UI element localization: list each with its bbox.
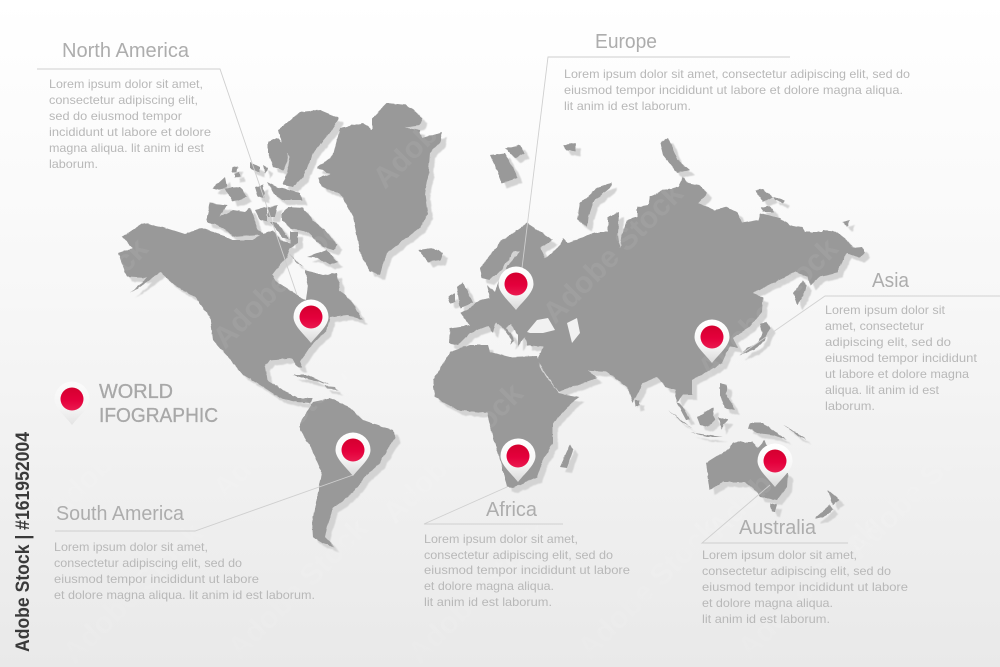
side credit: Adobe Stock | #161952004 [13, 432, 34, 652]
heading: Asia: Asia [872, 270, 910, 292]
island: Iceland [418, 248, 443, 262]
watermark: Adobe Stock [692, 232, 845, 385]
inland seas [527, 318, 580, 343]
continent: South America [300, 398, 395, 547]
pin: Africa [500, 438, 536, 482]
text block: Africa: et dolore magna aliqua. [424, 579, 554, 593]
continent: Eurasia [449, 177, 865, 403]
watermark: Adobe Stock [572, 512, 725, 665]
text block: Africa: eiusmod tempor incididunt ut labore [424, 563, 630, 577]
leader line: Australia [702, 485, 848, 543]
text block: Asia: amet, consectetur [825, 319, 924, 333]
leader line: Africa [424, 487, 563, 524]
watermark: Adobe Stock [842, 412, 995, 565]
watermark: Adobe Stock [732, 512, 885, 665]
heading: Europe: Europe [595, 31, 657, 53]
watermark: Adobe Stock [402, 517, 555, 667]
text block: Australia: consectetur adipiscing elit, sed do [702, 564, 891, 578]
text block: Europe [564, 67, 910, 113]
heading: Africa: Africa [486, 499, 538, 521]
watermark: Adobe Stock [207, 202, 360, 355]
heading: North America: North America [62, 40, 190, 62]
text block: North America [49, 77, 211, 171]
islands: Tasmania and New Zealand [770, 490, 840, 518]
watermark: Adobe Stock [207, 352, 360, 505]
legend pin [54, 382, 90, 425]
text block: South America [54, 540, 315, 602]
watermark: Adobe Stock [537, 72, 690, 225]
title: World Infographic: IFOGRAPHIC [99, 405, 218, 427]
watermark: Adobe Stock [832, 82, 985, 235]
text block: Asia: adipiscing elit, sed do [825, 335, 951, 349]
text block: Africa: lit anim id est laborum. [424, 595, 552, 609]
text block: Asia: laborum. [825, 399, 875, 413]
pin: Europe [498, 266, 534, 310]
text block: Africa: Lorem ipsum dolor sit amet, [424, 532, 578, 546]
islands: Europe and Arctic [448, 138, 850, 308]
text block: Africa [424, 532, 630, 609]
text block: North America: Lorem ipsum dolor sit amet, [49, 77, 203, 91]
text block: Asia: eiusmod tempor incididunt [825, 351, 978, 365]
leader line: Asia [740, 296, 1000, 355]
text block: Australia: Lorem ipsum dolor sit amet, [702, 548, 857, 562]
island: Madagascar [560, 445, 573, 468]
text block: South America: et dolore magna aliqua. lit anim id est laborum. [54, 588, 315, 602]
islands: Canadian Arctic [207, 110, 339, 267]
text block: Europe: Lorem ipsum dolor sit amet, consectetur adipiscing elit, sed do [564, 67, 910, 81]
text block: South America: eiusmod tempor incididunt ut labore [54, 572, 259, 586]
text block: Asia: aliqua. lit anim id est [825, 383, 940, 397]
continent: North America [118, 223, 363, 403]
text block: South America: consectetur adipiscing elit, sed do [54, 556, 242, 570]
watermark: Adobe Stock [842, 242, 995, 395]
text block: Africa: consectetur adipiscing elit, sed do [424, 548, 613, 562]
pin: South America [336, 432, 370, 476]
text block: North America: incididunt ut labore et dolore [49, 125, 211, 139]
pin: North America [294, 300, 328, 343]
text block: Asia: Lorem ipsum dolor sit [825, 303, 946, 317]
world map [118, 103, 865, 547]
watermark: Adobe Stock [702, 42, 855, 195]
leader line: South America [55, 475, 353, 531]
islands: East Asia [635, 280, 807, 440]
leader line: Europe [522, 57, 790, 268]
text block: North America: laborum. [49, 157, 98, 171]
continent: Africa [433, 345, 580, 488]
watermark: Adobe Stock [377, 377, 530, 530]
title: World Infographic [99, 381, 218, 427]
pin: Australia [758, 444, 792, 487]
text block: Asia: ut labore et dolore magna [825, 367, 969, 381]
text block: North America: magna aliqua. lit anim id est [49, 141, 205, 155]
heading: South America: South America [56, 503, 185, 525]
watermark: Adobe Stock [2, 232, 155, 385]
watermark: Adobe Stock [537, 177, 690, 330]
watermark: Adobe Stock [702, 392, 855, 545]
continent: Australia [706, 440, 788, 500]
watermark: Adobe Stock [222, 512, 375, 665]
leader line: North America [37, 69, 297, 295]
text block: Australia: lit anim id est laborum. [702, 612, 830, 626]
text block: North America: sed do eiusmod tempor [49, 109, 182, 123]
pin: Asia [694, 320, 730, 363]
text block: South America: Lorem ipsum dolor sit amet, [54, 540, 208, 554]
text block: Asia [825, 303, 978, 413]
heading: Australia: Australia [739, 517, 817, 539]
watermark: Adobe Stock [367, 42, 520, 195]
text block: Australia: et dolore magna aliqua. [702, 596, 833, 610]
text block: Australia [702, 548, 908, 626]
watermark: Adobe Stock [162, 72, 315, 225]
watermark: Adobe Stock [42, 372, 195, 525]
watermark: Adobe Stock [332, 247, 485, 400]
text block: Australia: eiusmod tempor incididunt ut labore [702, 580, 908, 594]
text block: Europe: eiusmod tempor incididunt ut labore et dolore magna aliqua. [564, 83, 903, 97]
text block: North America: consectetur adipiscing elit, [49, 93, 198, 107]
title: World Infographic: WORLD [99, 381, 173, 403]
watermark: Adobe Stock [57, 517, 210, 667]
islands: Caribbean [292, 375, 338, 390]
island: Greenland [317, 103, 442, 275]
text block: Europe: lit anim id est laborum. [564, 99, 691, 113]
